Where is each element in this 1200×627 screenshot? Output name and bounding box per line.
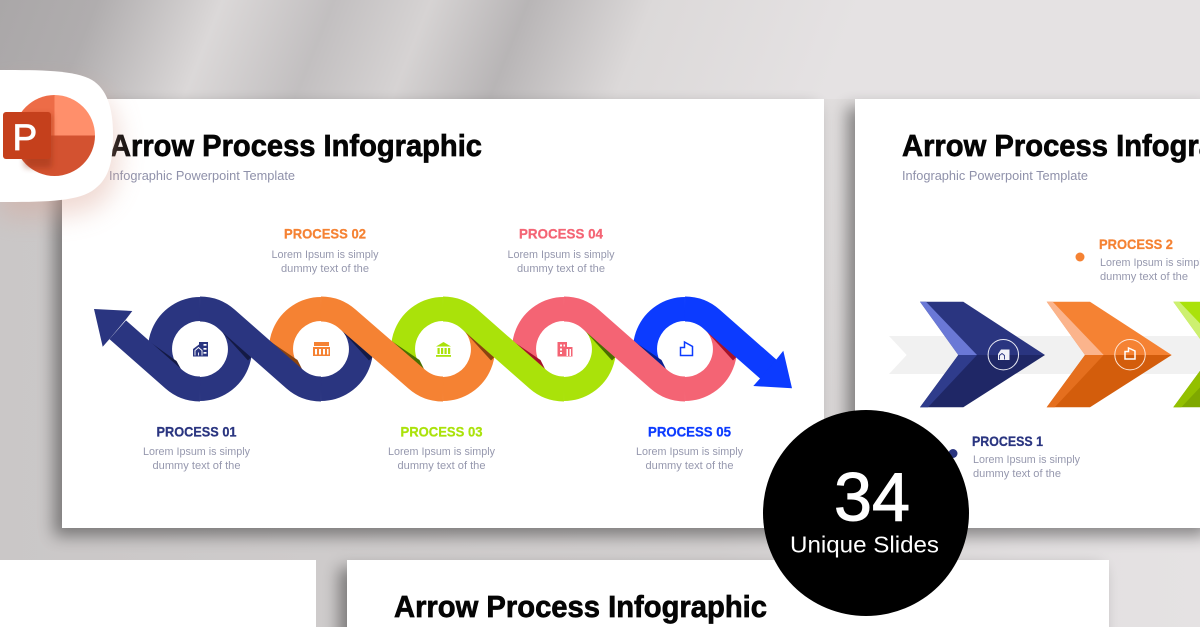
logo circle quadrants: [14, 95, 95, 176]
process 2 text: PROCESS 2: [1099, 236, 1173, 252]
ribbon arrow chart: [94, 309, 792, 389]
process 05 text: Lorem Ipsum is simply: [636, 446, 743, 458]
icon: outline box: [680, 342, 692, 356]
bottom slide title: Arrow Process Infographic: [394, 589, 767, 624]
process 2 text: [1076, 236, 1200, 283]
fold shadows: [149, 328, 736, 370]
badge: PowerPoint logo: [0, 70, 113, 202]
process 04 text: Lorem Ipsum is simply: [508, 249, 615, 261]
chevron: green: [1173, 302, 1200, 407]
icon ring: [1115, 340, 1145, 370]
process 03 text: dummy text of the: [398, 460, 486, 472]
icon: building on navy: [998, 350, 1010, 360]
badge shadow: [0, 85, 118, 217]
process 03 text: [388, 424, 495, 472]
process 1 text: [948, 433, 1080, 480]
right slide subtitle: Infographic Powerpoint Template: [902, 168, 1088, 183]
grey arrow band: [889, 336, 1200, 374]
main title: Arrow Process Infographic: [110, 128, 482, 163]
process 1 text: Lorem Ipsum is simply: [973, 454, 1080, 466]
process 03 text: PROCESS 03: [400, 424, 483, 440]
process 04 text: PROCESS 04: [519, 226, 603, 242]
icon: shop: [313, 342, 330, 356]
process 1 text: PROCESS 1: [972, 433, 1043, 449]
process 01 text: Lorem Ipsum is simply: [143, 446, 250, 458]
icon: bank: [436, 342, 451, 357]
logo fold shadow: [24, 114, 52, 168]
icon: house and building: [193, 342, 208, 356]
arrow: process 05 blue pointing down right: [685, 309, 792, 388]
icon: office block: [558, 342, 572, 356]
panel: bottom left slide: [0, 560, 316, 627]
process 05 text: dummy text of the: [646, 460, 734, 472]
card shadows: [54, 107, 1200, 627]
callout: 34 unique slides: [763, 410, 969, 616]
panel: main slide: [62, 99, 824, 528]
process 01 text: [143, 424, 250, 472]
arrow: start pointing up left: [94, 309, 200, 389]
process 03 text: Lorem Ipsum is simply: [388, 446, 495, 458]
panel: bottom slide: [347, 560, 1109, 627]
icon: box on orange: [1125, 348, 1135, 359]
callout label: Unique Slides: [790, 532, 939, 558]
process 02 text: Lorem Ipsum is simply: [272, 249, 379, 261]
logo letter: P: [12, 117, 37, 158]
chevron: navy: [920, 302, 1045, 407]
process 05 text: PROCESS 05: [648, 424, 731, 440]
process 1 text: dummy text of the: [973, 468, 1061, 480]
callout number: 34: [834, 458, 910, 536]
main subtitle: Infographic Powerpoint Template: [109, 168, 295, 183]
icon ring: [988, 340, 1018, 370]
process 02 text: PROCESS 02: [284, 226, 366, 242]
panel: right slide: [855, 99, 1200, 528]
band: process 04 pink: [564, 309, 685, 389]
chevron: orange: [1047, 302, 1172, 407]
process 04 text: [508, 226, 615, 275]
logo tile: [3, 112, 51, 159]
process 04 text: dummy text of the: [517, 263, 605, 275]
process 01 text: PROCESS 01: [156, 424, 237, 440]
band: process 03 green: [443, 309, 564, 389]
ring start and end segments: [160, 309, 725, 389]
process 02 text: dummy text of the: [281, 263, 369, 275]
process 2 text: dummy text of the: [1100, 271, 1188, 283]
process 02 text: [272, 226, 379, 275]
process 01 text: dummy text of the: [152, 460, 240, 472]
band: process 02 orange: [321, 309, 443, 389]
band: process 01 navy: [200, 309, 321, 389]
process 05 text: [636, 424, 743, 472]
